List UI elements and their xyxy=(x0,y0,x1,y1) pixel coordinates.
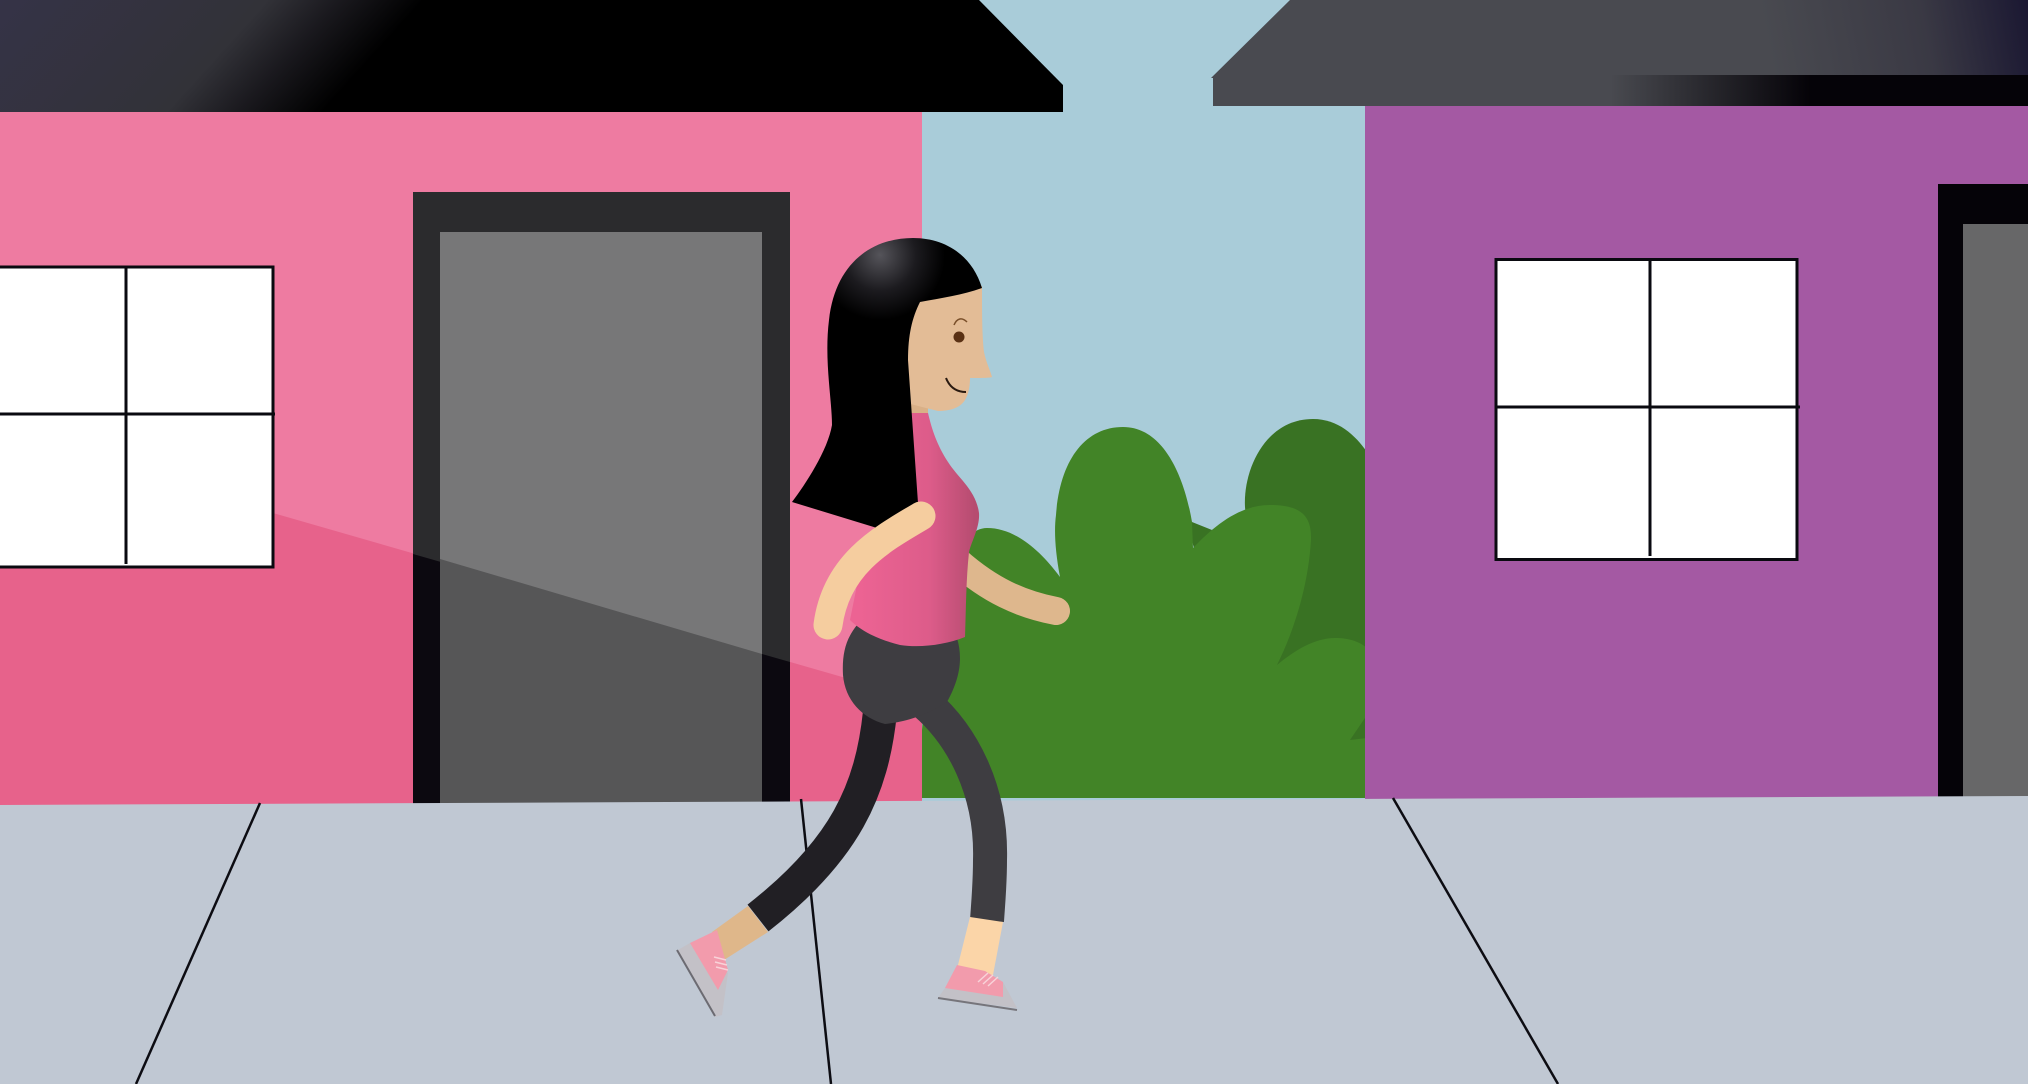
bush xyxy=(922,419,1367,798)
wall: pink xyxy=(0,112,922,807)
neck xyxy=(905,395,928,417)
front leg xyxy=(925,703,1017,1010)
sidewalk xyxy=(0,796,2028,1084)
pink house xyxy=(0,112,922,807)
door: purple house xyxy=(1938,184,2028,800)
rear shoe xyxy=(677,930,728,1017)
front shoe xyxy=(938,965,1017,1010)
torso xyxy=(850,413,979,646)
window: pink house xyxy=(0,267,275,567)
hair xyxy=(792,238,982,528)
hips xyxy=(843,625,960,724)
right roof xyxy=(1211,0,2028,106)
purple house xyxy=(1365,106,2028,801)
wall: purple xyxy=(1365,106,2028,801)
window: purple house xyxy=(1496,260,1800,560)
door: pink house xyxy=(413,192,790,804)
wall shadow xyxy=(0,513,922,807)
eye xyxy=(954,332,964,342)
left roof xyxy=(0,0,1063,112)
rear leg xyxy=(677,712,880,1017)
smile xyxy=(946,378,966,392)
face xyxy=(890,286,992,411)
back arm xyxy=(958,562,1056,611)
eyebrow xyxy=(954,319,967,325)
front ankle xyxy=(957,917,1003,975)
sidewalk joint lines xyxy=(136,798,1558,1084)
front arm xyxy=(828,516,921,625)
sky xyxy=(0,0,2028,810)
rear ankle xyxy=(712,906,768,960)
woman walking xyxy=(677,238,1056,1017)
